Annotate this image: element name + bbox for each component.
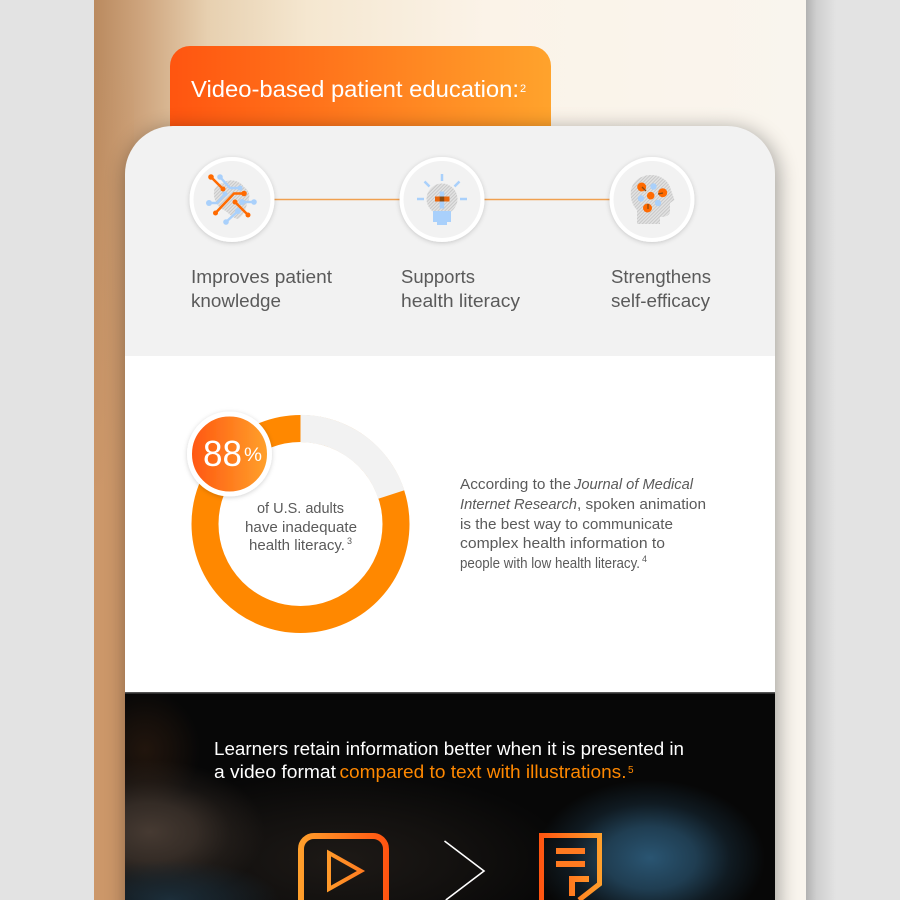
donut chart	[205, 428, 396, 620]
text block: spoken animation: complex health information to	[460, 535, 665, 552]
label: improves patient knowledge: Improves patient	[191, 267, 332, 287]
label: supports health literacy	[401, 267, 520, 311]
label: strengthens self-efficacy: self-efficacy	[611, 291, 710, 311]
icon: brain with circuit lines	[192, 159, 272, 240]
text block: spoken animation: Journal of Medical	[573, 476, 694, 493]
callout: 88 percent badge: 88	[203, 433, 242, 474]
text block: spoken animation: people with low health literacy.	[460, 555, 640, 572]
text block: spoken animation: is the best way to communicate	[460, 516, 673, 533]
text block: learners retain information	[214, 739, 684, 782]
donut caption: of U.S. adults	[257, 500, 344, 517]
donut caption	[245, 500, 357, 554]
panel: video versus text	[125, 692, 775, 900]
text block: learners retain information: compared to text with illustrations.	[340, 762, 626, 782]
icon: video play	[301, 836, 386, 900]
label: strengthens self-efficacy	[611, 267, 711, 311]
heading tab	[170, 46, 551, 130]
donut caption: 3	[347, 536, 352, 546]
text block: spoken animation: Internet Research	[460, 496, 577, 513]
label: improves patient knowledge: knowledge	[191, 291, 281, 311]
heading tab: 2	[520, 83, 526, 95]
text block: spoken animation: According to the	[460, 476, 571, 493]
panel: video-based benefits	[125, 126, 775, 356]
icon: greater-than chevron	[444, 841, 484, 900]
panel: health literacy statistic	[125, 356, 775, 692]
text block: spoken animation: 4	[642, 554, 647, 564]
callout: 88 percent badge	[190, 414, 270, 494]
heading tab: Video-based patient education:	[191, 76, 519, 102]
text block: learners retain information: 5	[628, 765, 634, 776]
icon: light bulb with plus	[402, 159, 482, 240]
label: improves patient knowledge	[191, 267, 332, 311]
text block: learners retain information: a video format	[214, 762, 336, 782]
label: supports health literacy: Supports	[401, 267, 475, 287]
icon: document with text	[542, 836, 600, 900]
card shadow	[127, 130, 777, 900]
text block: spoken animation: , spoken animation	[577, 496, 706, 513]
text block: learners retain information: Learners retain information better when it is presented in	[214, 739, 684, 759]
label: supports health literacy: health literacy	[401, 291, 520, 311]
icon: head with nodes	[612, 159, 692, 240]
text block: spoken animation	[460, 476, 706, 572]
donut caption: have inadequate	[245, 519, 357, 536]
callout: 88 percent badge: %	[244, 445, 262, 466]
label: strengthens self-efficacy: Strengthens	[611, 267, 711, 287]
donut caption: health literacy.	[249, 537, 345, 554]
